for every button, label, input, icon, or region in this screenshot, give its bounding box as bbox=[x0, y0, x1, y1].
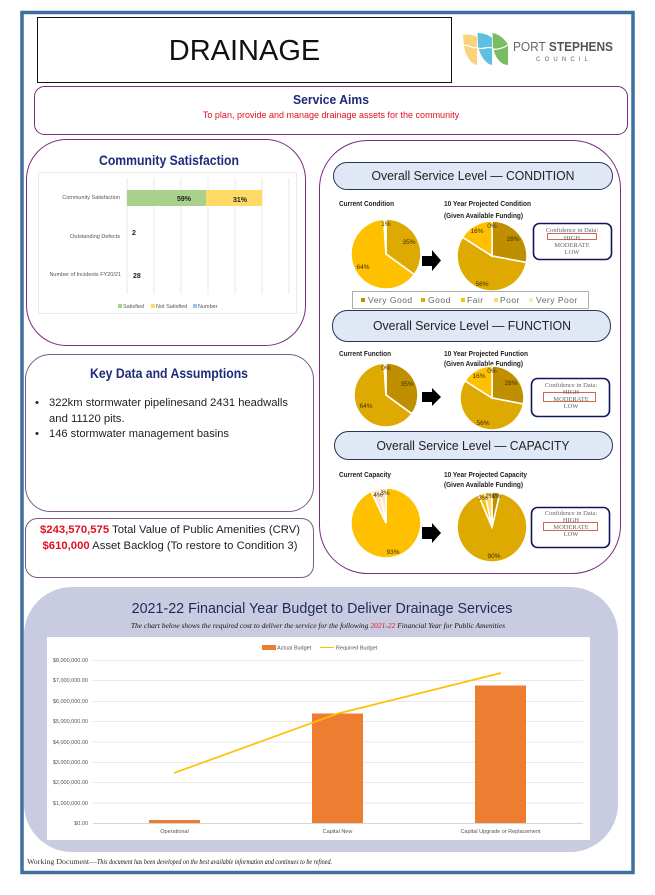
bar chart: community satisfaction: 31% bbox=[233, 197, 248, 204]
x axis labels: Capital New bbox=[323, 829, 352, 835]
pie: current capacity: 93% bbox=[386, 549, 400, 556]
legend: pie colours: Fair bbox=[467, 295, 484, 305]
pie: projected condition: 28% bbox=[506, 236, 520, 243]
panel: key data and assumptions: • bbox=[35, 397, 39, 409]
callout: confidence capacity: MODERATE bbox=[553, 524, 589, 531]
pie: current condition: 35% bbox=[402, 239, 416, 246]
y axis labels: $7,000,000.00 bbox=[53, 678, 88, 684]
title box bbox=[38, 18, 452, 82]
label: current function: Current Function bbox=[339, 351, 391, 358]
panel: key data and assumptions: • bbox=[35, 428, 39, 440]
text: budget subtitle: The chart below shows the required cost to deliver the service for the following 2021-22 Financial Year for Public Amenities bbox=[131, 621, 505, 630]
pie: projected function: 28% bbox=[504, 380, 518, 387]
arrow: function bbox=[422, 388, 441, 406]
bar chart: community satisfaction: Not Satisfied bbox=[156, 304, 187, 310]
y axis labels: $5,000,000.00 bbox=[53, 719, 88, 725]
logo: Port Stephens Council: PORT STEPHENS bbox=[513, 39, 613, 54]
callout: confidence capacity: Confidence in Data: bbox=[545, 510, 597, 517]
pie: projected function: 0% bbox=[487, 368, 497, 375]
pie: projected function: 16% bbox=[472, 373, 486, 380]
callout: confidence function: Confidence in Data: bbox=[545, 382, 597, 389]
footer note bbox=[27, 857, 332, 866]
y axis labels: $2,000,000.00 bbox=[53, 780, 88, 786]
pie: projected function: 56% bbox=[476, 420, 490, 427]
label: projected condition: 10 Year Projected Condition bbox=[444, 201, 531, 208]
callout: confidence condition: LOW bbox=[565, 249, 580, 256]
label: projected condition: (Given Available Funding) bbox=[444, 213, 523, 220]
legend: pie colours: Very Good bbox=[368, 295, 413, 305]
label: projected capacity: (Given Available Funding) bbox=[444, 482, 523, 489]
heading: capacity bbox=[334, 432, 612, 460]
pie: current function: 35% bbox=[400, 381, 414, 388]
label: projected function bbox=[444, 351, 528, 368]
label: current condition: Current Condition bbox=[339, 201, 394, 208]
pie: current capacity bbox=[351, 488, 421, 558]
callout: confidence condition bbox=[534, 224, 612, 260]
footer note: Working Document— bbox=[27, 857, 98, 866]
panel: key data and assumptions: 322km stormwater pipelinesand 2431 headwalls bbox=[49, 397, 288, 409]
y axis labels: $3,000,000.00 bbox=[53, 760, 88, 766]
bar chart: community satisfaction: Community Satisfaction bbox=[62, 195, 120, 201]
panel: key data and assumptions: Key Data and Assumptions bbox=[90, 366, 248, 381]
footer note: This document has been developed on the best available information and continues to be refined. bbox=[97, 858, 332, 866]
panel: asset value: $243,570,575 Total Value of Public Amenities (CRV) bbox=[40, 524, 300, 536]
pie: projected capacity: 1% bbox=[491, 493, 501, 500]
callout: confidence function: LOW bbox=[564, 403, 579, 410]
pie: current function: 64% bbox=[359, 403, 373, 410]
pie: current function: 0% bbox=[381, 365, 391, 372]
bar chart: community satisfaction: 2 bbox=[132, 230, 136, 237]
chart legend bbox=[262, 645, 378, 652]
panel: key data and assumptions: 146 stormwater management basins bbox=[49, 428, 229, 440]
label: projected function: 10 Year Projected Function bbox=[444, 351, 528, 358]
pie: projected function bbox=[460, 366, 524, 430]
x axis labels: Operational bbox=[160, 829, 189, 835]
pie: current capacity: 3% bbox=[380, 490, 390, 497]
bar chart: community satisfaction: 59% bbox=[177, 196, 192, 203]
callout: confidence capacity bbox=[532, 508, 610, 548]
y axis labels: $6,000,000.00 bbox=[53, 699, 88, 705]
label: projected condition bbox=[444, 201, 531, 220]
panel: service aims bbox=[34, 86, 628, 134]
heading: capacity: Overall Service Level — CAPACITY bbox=[376, 439, 570, 453]
pie: projected condition: 56% bbox=[475, 281, 489, 288]
bar chart: community satisfaction: 28 bbox=[133, 273, 141, 280]
pie: current function bbox=[354, 363, 418, 427]
label: projected capacity: 10 Year Projected Capacity bbox=[444, 472, 527, 479]
chart: budget bars and line bbox=[47, 637, 590, 840]
chart legend: Actual Budget bbox=[277, 646, 312, 652]
legend: pie colours: Very Poor bbox=[536, 295, 578, 305]
title box: DRAINAGE bbox=[169, 35, 320, 67]
pie: current condition: 1% bbox=[381, 221, 391, 228]
heading: budget: 2021-22 Financial Year Budget to Deliver Drainage Services bbox=[132, 601, 512, 617]
heading: condition: Overall Service Level — CONDITION bbox=[372, 169, 574, 183]
heading: function: Overall Service Level — FUNCTION bbox=[373, 319, 571, 333]
callout: confidence condition: Confidence in Data: bbox=[546, 227, 598, 234]
pie: current condition: 64% bbox=[356, 264, 370, 271]
x axis labels: Capital Upgrade or Replacement bbox=[460, 829, 541, 835]
pie: projected capacity bbox=[457, 492, 527, 562]
callout: confidence function: HIGH bbox=[563, 389, 579, 396]
logo: Port Stephens Council bbox=[463, 33, 613, 65]
pie: projected capacity: 90% bbox=[487, 553, 501, 560]
callout: confidence capacity: HIGH bbox=[563, 517, 579, 524]
callout: confidence function bbox=[532, 378, 610, 416]
legend: pie colours bbox=[352, 292, 588, 308]
pie: projected capacity: 3% bbox=[478, 495, 488, 502]
y axis labels: $0.00 bbox=[74, 821, 88, 827]
bars: actual budget bbox=[149, 686, 526, 823]
bar chart: community satisfaction: Satisfied bbox=[123, 304, 144, 310]
y axis labels bbox=[53, 658, 88, 827]
arrow: condition bbox=[422, 250, 441, 271]
legend: pie colours: Good bbox=[428, 295, 451, 305]
label: projected function: (Given Available Funding) bbox=[444, 361, 523, 368]
callout: confidence condition: HIGH bbox=[564, 235, 580, 242]
pie: projected capacity: 2% bbox=[485, 493, 495, 500]
label: current capacity: Current Capacity bbox=[339, 472, 391, 479]
callout: confidence capacity: LOW bbox=[564, 531, 579, 538]
pie: projected condition: 16% bbox=[470, 228, 484, 235]
label: projected capacity bbox=[444, 472, 527, 489]
line: required budget bbox=[174, 673, 501, 773]
panel: asset value bbox=[26, 518, 314, 578]
heading: function bbox=[332, 310, 610, 342]
panel: service aims: Service Aims bbox=[293, 92, 369, 107]
panel: service aims: To plan, provide and manage drainage assets for the community bbox=[203, 110, 460, 120]
callout: confidence function: MODERATE bbox=[553, 396, 589, 403]
pie: current capacity: 4% bbox=[373, 492, 383, 499]
callout: confidence condition: MODERATE bbox=[554, 242, 590, 249]
bar chart: community satisfaction: Outstanding Defects bbox=[70, 234, 120, 240]
legend: pie colours: Poor bbox=[500, 295, 520, 305]
panel: budget bbox=[24, 587, 618, 852]
pie: projected condition: 0% bbox=[487, 223, 497, 230]
panel: key data and assumptions: and 11120 pits. bbox=[49, 413, 125, 425]
bar chart: community satisfaction bbox=[38, 172, 296, 314]
bar chart: community satisfaction: Number of Incidents FY20/21 bbox=[49, 272, 121, 278]
x axis labels bbox=[160, 829, 541, 835]
y axis labels: $8,000,000.00 bbox=[53, 658, 88, 664]
heading: condition bbox=[334, 162, 612, 190]
heading: community satisfaction: Community Satisfaction bbox=[99, 153, 239, 168]
panel: community satisfaction bbox=[26, 140, 306, 346]
chart legend: Required Budget bbox=[336, 646, 378, 652]
panel: overall service levels bbox=[320, 140, 620, 574]
y axis labels: $4,000,000.00 bbox=[53, 740, 88, 746]
panel: asset value: $610,000 Asset Backlog (To restore to Condition 3) bbox=[43, 540, 298, 552]
bar chart: community satisfaction: Number bbox=[198, 304, 218, 310]
logo: Port Stephens Council: COUNCIL bbox=[536, 57, 589, 63]
panel: key data and assumptions bbox=[26, 354, 314, 512]
pie: projected condition bbox=[457, 221, 527, 291]
y axis labels: $1,000,000.00 bbox=[53, 801, 88, 807]
arrow: capacity bbox=[422, 523, 441, 543]
pie: current condition bbox=[351, 219, 421, 289]
